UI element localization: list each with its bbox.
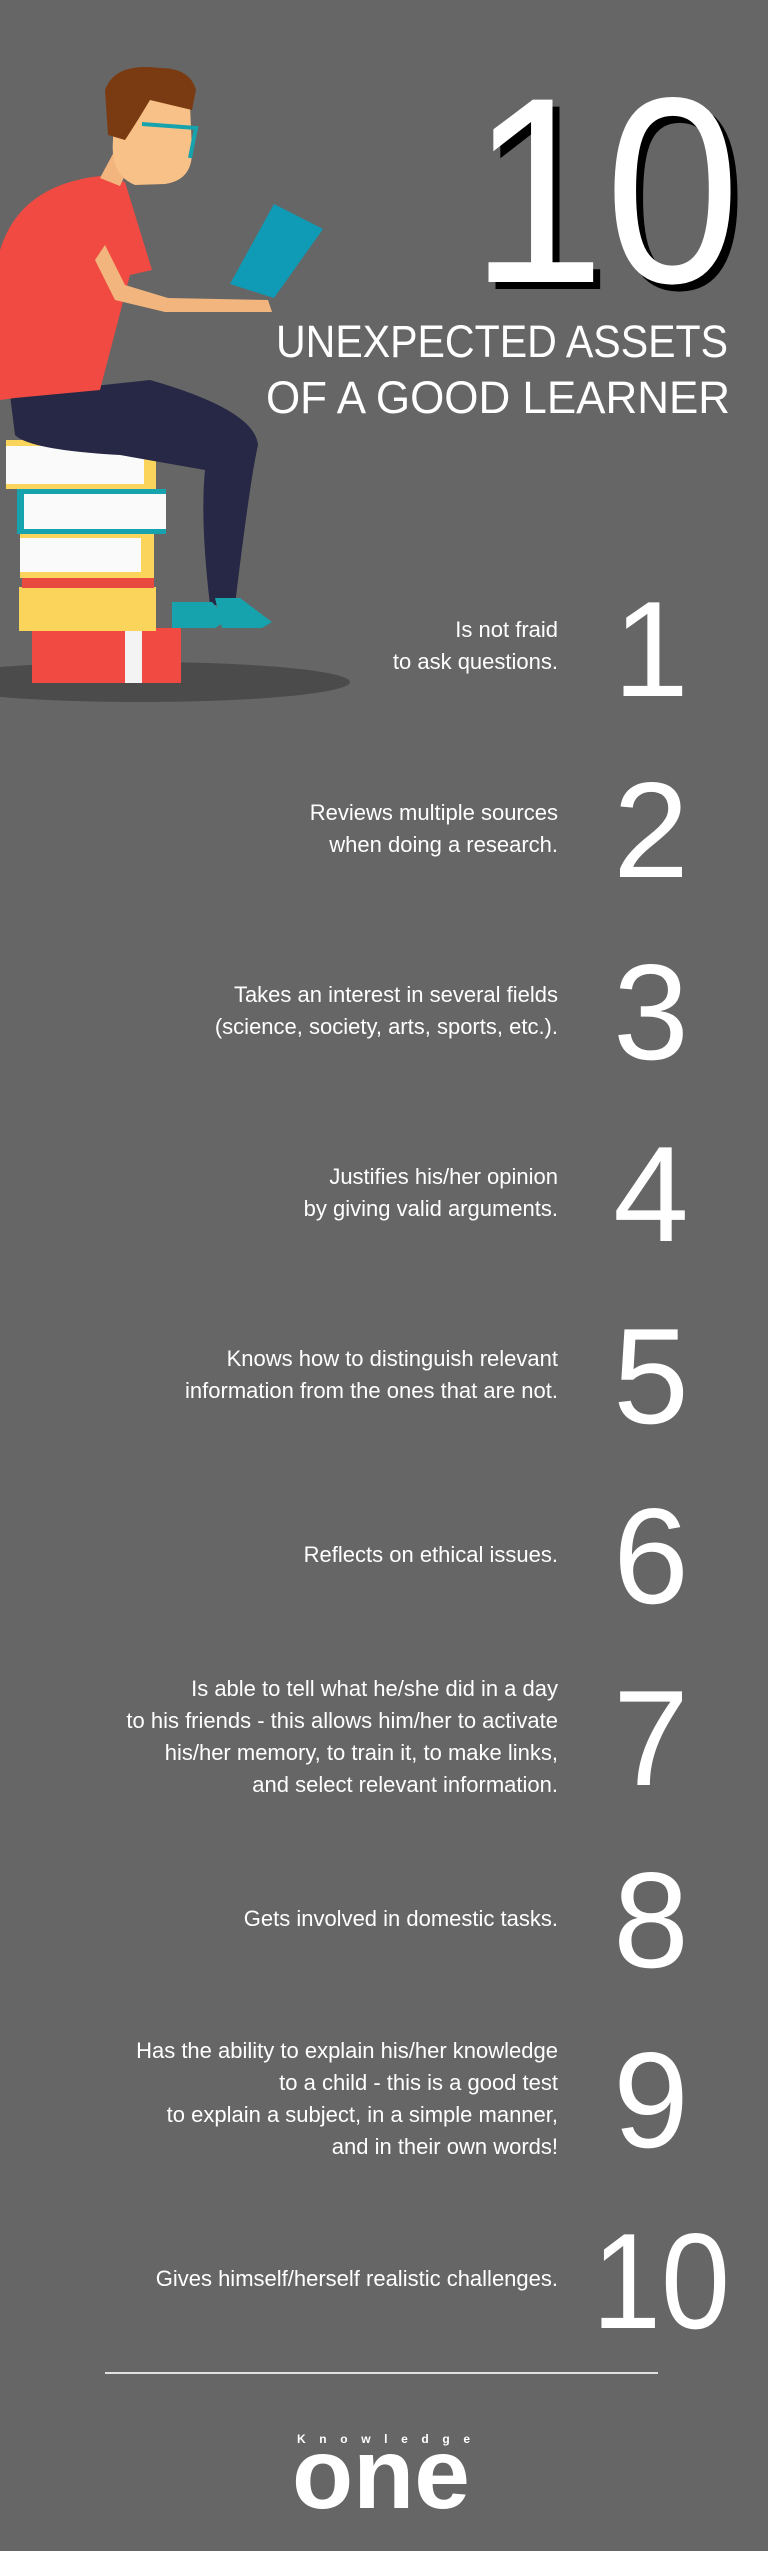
item 7: Is able to tell what he/she did in a day [191,1676,558,1701]
neck and head [100,150,132,186]
item 1 [393,573,689,725]
item 2: when doing a research. [328,832,558,857]
item 5: Knows how to distinguish relevant [227,1346,558,1371]
item 9: to a child - this is a good test [279,2070,558,2095]
item 3: (science, society, arts, sports, etc.). [215,1014,558,1039]
item 4 [304,1118,689,1270]
item 8: Gets involved in domestic tasks. [244,1906,558,1931]
title: big 10: 10 [470,43,740,339]
item 10: 10 [592,2205,730,2357]
item 9: Has the ability to explain his/her knowledge [136,2038,558,2063]
reading book [230,204,323,298]
item 10 [156,2205,730,2357]
item 3 [215,936,689,1088]
item 1: Is not fraid [455,617,558,642]
item 6: Reflects on ethical issues. [304,1542,558,1567]
item 4: 4 [613,1118,689,1270]
item 4: Justifies his/her opinion [329,1164,558,1189]
item 9: 9 [613,2024,689,2176]
item 7: to his friends - this allows him/her to activate [126,1708,558,1733]
books stack [6,440,181,683]
shoes [172,598,272,628]
item 5: 5 [613,1300,689,1452]
shirt [0,176,152,400]
item 3: Takes an interest in several fields [234,982,558,1007]
item 7 [126,1662,689,1814]
subtitle: UNEXPECTED ASSETS [276,316,728,367]
item 6 [304,1480,689,1632]
item 5: information from the ones that are not. [185,1378,558,1403]
subtitle: OF A GOOD LEARNER [266,372,730,423]
item 9: and in their own words! [332,2134,558,2159]
pants [10,380,258,605]
illustration: learner sitting on books [0,67,350,702]
logo: Knowledge one: Knowledge [297,2432,470,2446]
item 9 [136,2024,689,2176]
item 7: 7 [613,1662,689,1814]
item 1: to ask questions. [393,649,558,674]
arm [95,245,272,312]
title: big 10: 10 [477,50,747,346]
logo: Knowledge one: one [292,2418,470,2530]
item 10: Gives himself/herself realistic challenges. [156,2266,558,2291]
item 6: 6 [613,1480,689,1632]
item 7: his/her memory, to train it, to make links, [165,1740,558,1765]
item 3: 3 [613,936,689,1088]
item 4: by giving valid arguments. [304,1196,558,1221]
item 2 [310,754,689,906]
item 7: and select relevant information. [252,1772,558,1797]
item 2: 2 [613,754,689,906]
item 8 [244,1844,689,1996]
subtitle [266,316,730,423]
item 1: 1 [613,573,689,725]
item 2: Reviews multiple sources [310,800,558,825]
item 5 [185,1300,689,1452]
item 8: 8 [613,1844,689,1996]
item 9: to explain a subject, in a simple manner, [167,2102,558,2127]
